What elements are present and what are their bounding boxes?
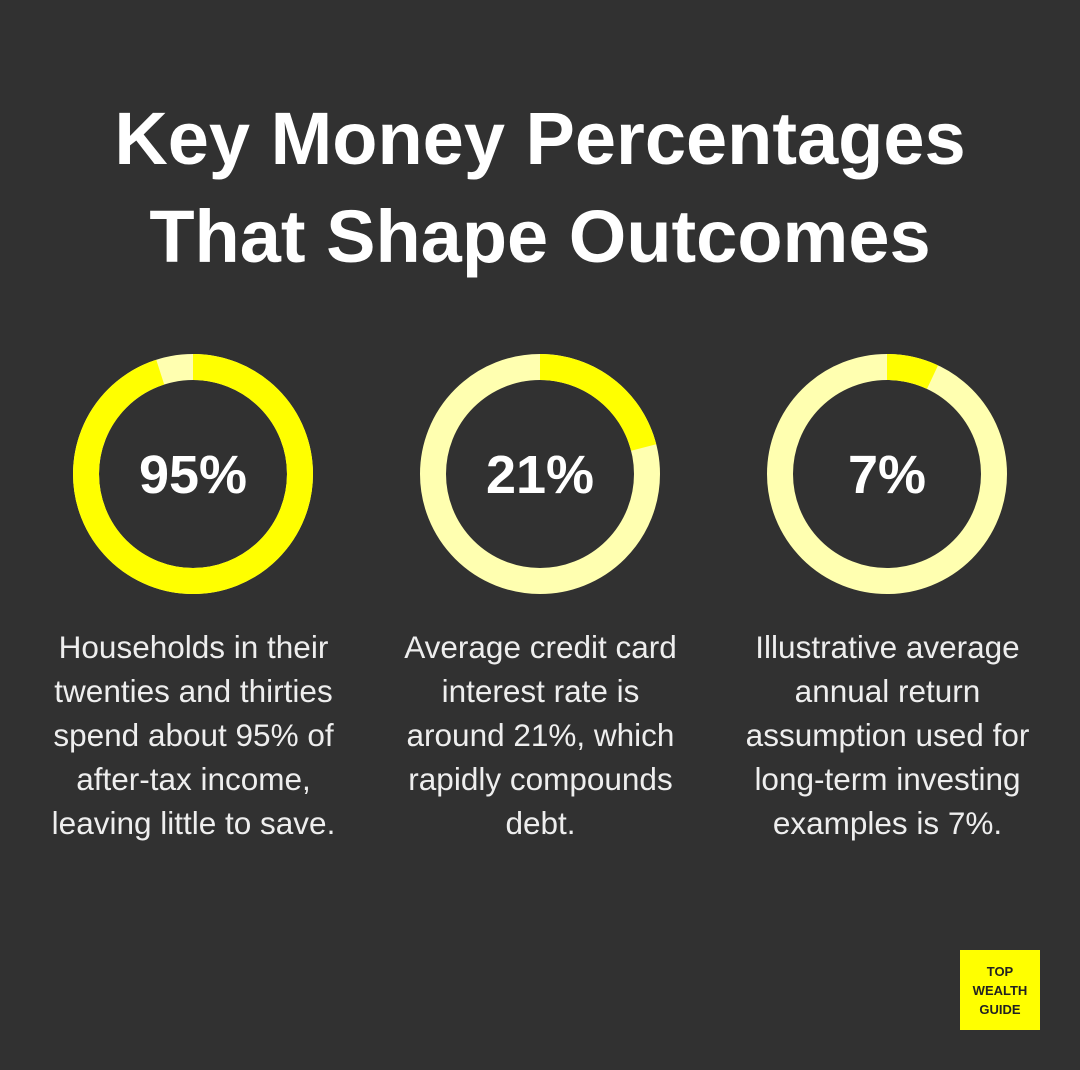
text: 95% description: after-tax income, <box>76 761 311 797</box>
text: 21% description: around 21%, which <box>407 717 674 753</box>
text: 7% description: long-term investing <box>754 761 1021 797</box>
logo <box>960 950 1040 1030</box>
text: 95% description <box>52 629 335 841</box>
text: 7% description: examples is 7%. <box>773 805 1002 841</box>
title: That Shape Outcomes <box>149 195 931 278</box>
text: 95% description: spend about 95% of <box>53 717 334 753</box>
text: 21% description: interest rate is <box>442 673 639 709</box>
donut: 7%: 7% <box>848 445 926 505</box>
donut: 95%: 95% <box>139 445 247 505</box>
text: 7% description: annual return <box>795 673 980 709</box>
logo: TOP <box>987 964 1013 978</box>
text: 95% description: twenties and thirties <box>54 673 333 709</box>
text: 21% description: debt. <box>505 805 576 841</box>
donut charts <box>73 354 1007 594</box>
text: 21% description: rapidly compounds <box>408 761 673 797</box>
title: Key Money Percentages <box>114 97 966 180</box>
donut: 95% <box>86 367 300 581</box>
logo: GUIDE <box>979 1002 1021 1016</box>
text: 21% description: Average credit card <box>404 629 677 665</box>
logo: WEALTH <box>973 982 1027 998</box>
donut: 21%: 21% <box>486 445 594 505</box>
donut: 21% <box>433 367 647 581</box>
donut: 7% <box>780 367 994 581</box>
text: 7% description: Illustrative average <box>755 629 1020 665</box>
text: 7% description <box>746 629 1029 841</box>
text: 95% description: leaving little to save. <box>52 805 335 841</box>
text: 7% description: assumption used for <box>746 717 1029 753</box>
text: 21% description <box>404 629 677 841</box>
text: 95% description: Households in their <box>59 629 328 665</box>
title <box>114 97 966 278</box>
